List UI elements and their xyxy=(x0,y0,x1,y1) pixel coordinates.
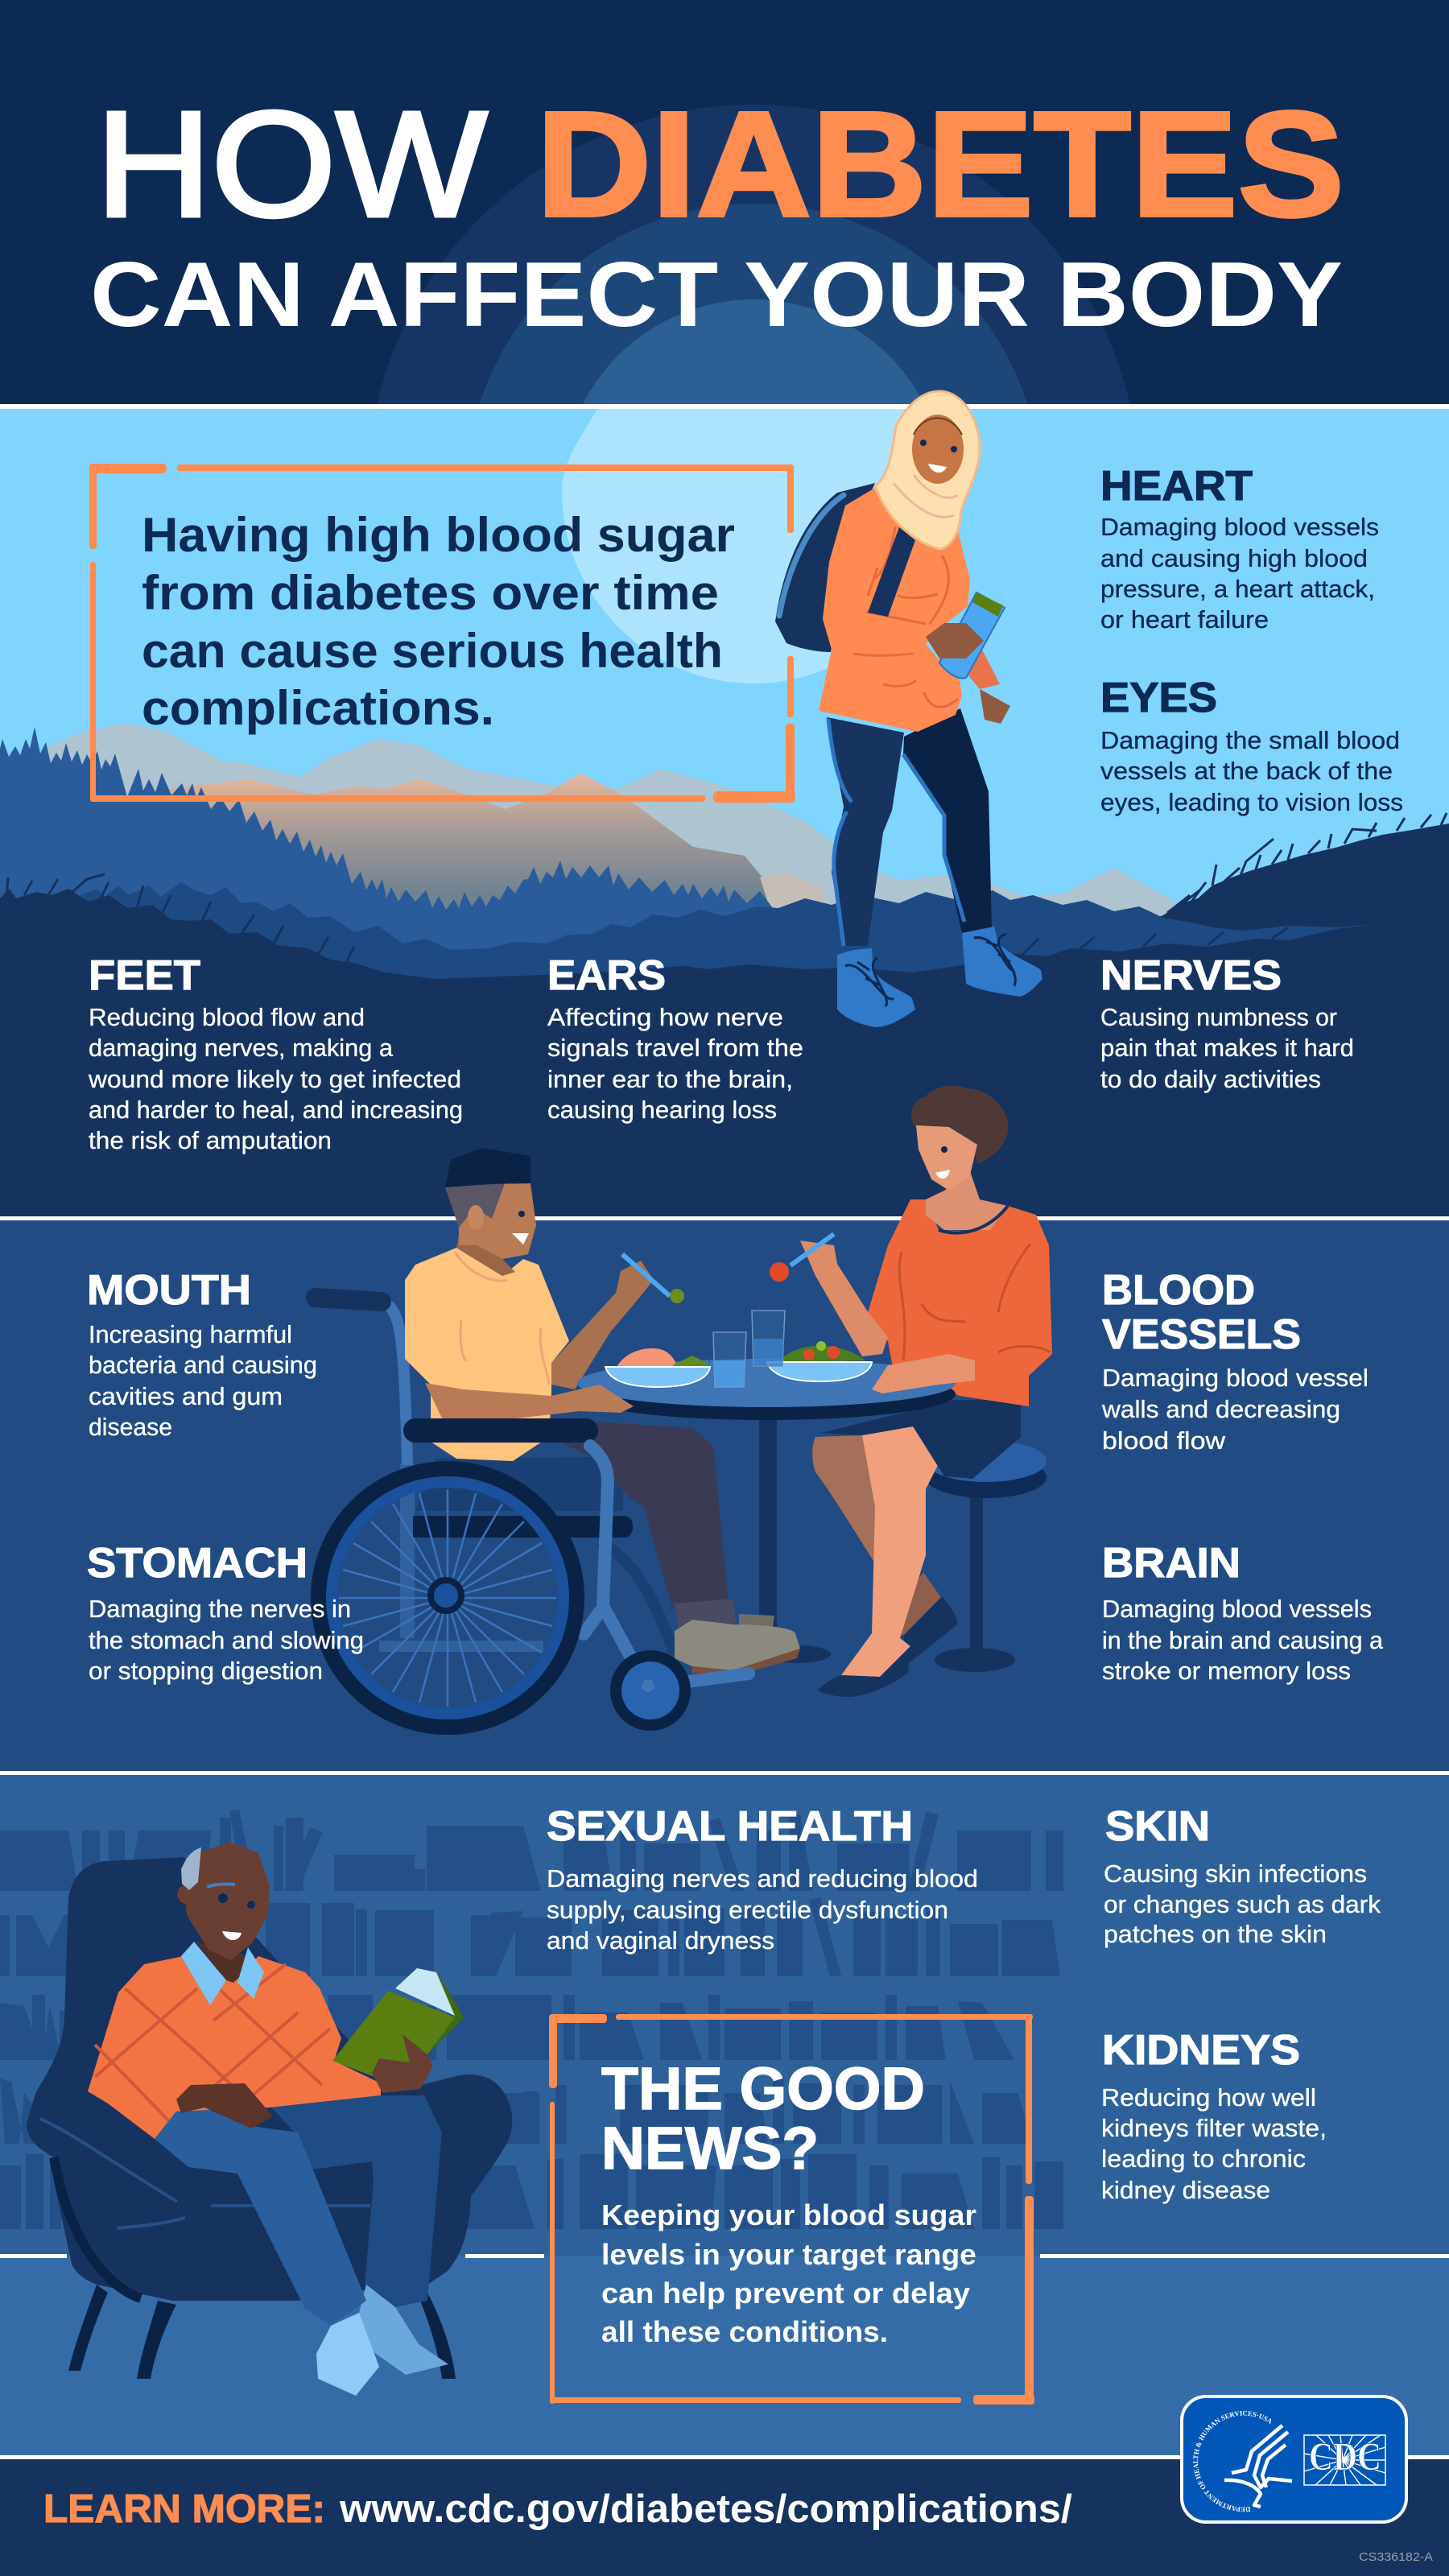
chair legs xyxy=(68,2285,456,2379)
text block: sexual health: SEXUAL HEALTH xyxy=(547,1803,913,1850)
ear xyxy=(468,1205,484,1229)
skirt xyxy=(821,1400,1021,1479)
man in wheelchair xyxy=(316,1148,800,1676)
text block: heart: HEART xyxy=(1100,463,1253,510)
text block: heart: and causing high blood xyxy=(1100,544,1368,572)
text block: nerves: to do daily activities xyxy=(1100,1065,1321,1093)
neck xyxy=(926,1171,1008,1230)
text block: stomach: the stomach and slowing xyxy=(89,1626,364,1654)
trouser cuff xyxy=(675,1599,736,1631)
text block: ears: inner ear to the brain, xyxy=(547,1065,793,1093)
hand on book xyxy=(372,2034,433,2093)
head xyxy=(185,1842,270,1960)
text block: stomach: STOMACH xyxy=(87,1540,308,1587)
handle xyxy=(316,1298,382,1302)
right bowl with salad xyxy=(767,1341,872,1381)
text block: feet: and harder to heal, and increasing xyxy=(89,1096,463,1124)
far arm xyxy=(800,1241,888,1356)
good news heading xyxy=(601,2055,925,2182)
argyle pattern xyxy=(95,1964,330,2129)
middle hill with grass xyxy=(80,882,1393,998)
text block: brain: stroke or memory loss xyxy=(1102,1657,1351,1685)
intro text: can cause serious health xyxy=(142,624,723,678)
title word: how: HOW xyxy=(96,81,487,248)
panel: header background xyxy=(0,0,1449,405)
left front hill and foreground xyxy=(0,889,1449,998)
hair xyxy=(181,1847,201,1890)
neck xyxy=(456,1228,515,1276)
water bottle xyxy=(939,592,1005,679)
good news text: can help prevent or delay xyxy=(601,2277,970,2310)
back leg xyxy=(903,708,992,933)
text block: heart: pressure, a heart attack, xyxy=(1100,575,1375,603)
text block: skin xyxy=(1104,1803,1381,1948)
intro text: Having high blood sugar xyxy=(142,508,735,562)
text block: brain xyxy=(1102,1540,1384,1685)
good news text: all these conditions. xyxy=(601,2315,888,2348)
sun rings in header xyxy=(367,105,1140,877)
subtitle: CAN AFFECT YOUR BODY xyxy=(90,244,1343,346)
hand xyxy=(926,623,984,658)
text block: stomach: Damaging the nerves in xyxy=(89,1595,351,1623)
document code: CS336182-A xyxy=(1359,2550,1433,2564)
eyes xyxy=(218,1893,255,1909)
hair xyxy=(445,1148,530,1187)
CDC box: CDC xyxy=(1309,2434,1381,2479)
text block: brain: Damaging blood vessels xyxy=(1102,1595,1372,1623)
text block: mouth: Increasing harmful xyxy=(89,1320,292,1348)
shoulder strap xyxy=(868,527,915,617)
logo: HHS and CDC xyxy=(1180,2395,1408,2524)
text block: ears: Affecting how nerve xyxy=(547,1003,783,1031)
far mountains xyxy=(0,723,1183,950)
hair xyxy=(911,1086,1009,1164)
text block: eyes xyxy=(1100,675,1403,816)
face xyxy=(916,1125,977,1191)
hair fade xyxy=(445,1183,505,1228)
text block: eyes: Damaging the small blood xyxy=(1100,726,1400,754)
neck xyxy=(196,1942,248,1983)
text block: feet: Reducing blood flow and xyxy=(89,1003,365,1031)
armchair xyxy=(27,1857,512,2301)
fork with tomato xyxy=(770,1234,834,1282)
text block: sexual health: supply, causing erectile dysfunction xyxy=(547,1896,948,1924)
text block: brain: BRAIN xyxy=(1102,1540,1241,1587)
table top xyxy=(577,1359,956,1420)
front leg xyxy=(827,717,904,946)
table foot shadow xyxy=(763,1645,831,1663)
face xyxy=(912,415,964,484)
far shoe xyxy=(903,1596,957,1664)
callout frame: intro xyxy=(89,464,795,803)
far leg xyxy=(271,2095,442,2307)
man's near arm xyxy=(425,1383,634,1426)
hand on knee xyxy=(176,2083,273,2128)
text block: nerves: NERVES xyxy=(1100,952,1282,999)
rear strut xyxy=(600,1542,675,1654)
logo: HHS and CDC: DEPARTMENT OF HEALTH & HUMAN SERVICES·USA xyxy=(1193,2410,1272,2512)
near leg xyxy=(155,2110,366,2326)
text block: blood vessels: Damaging blood vessel xyxy=(1102,1364,1368,1392)
caster wheel xyxy=(610,1650,691,1731)
book xyxy=(332,1968,464,2079)
section dividers xyxy=(0,1216,1449,1775)
text block: skin: or changes such as dark xyxy=(1104,1890,1381,1918)
HHS eagle xyxy=(1224,2425,1292,2507)
glasses of water xyxy=(713,1311,785,1387)
woman's near arm xyxy=(872,1354,975,1393)
footer link: LEARN MORE: xyxy=(43,2487,325,2531)
collar xyxy=(181,1942,264,2005)
text block: eyes: eyes, leading to vision loss xyxy=(1100,788,1403,816)
text block: brain: in the brain and causing a xyxy=(1102,1626,1384,1654)
text block: stomach: or stopping digestion xyxy=(89,1657,323,1685)
backpack xyxy=(775,483,875,652)
text block: ears: EARS xyxy=(547,952,666,999)
big wheel xyxy=(319,1469,576,1727)
text block: skin: SKIN xyxy=(1105,1803,1210,1850)
footer divider xyxy=(0,2455,1449,2459)
forest xyxy=(0,727,805,982)
far sock xyxy=(359,2285,448,2375)
boots xyxy=(837,948,915,1027)
text block: skin: patches on the skin xyxy=(1104,1920,1327,1948)
text block: mouth: cavities and gum xyxy=(89,1382,283,1410)
text block: nerves xyxy=(1100,952,1354,1093)
smile xyxy=(935,1170,950,1179)
text block: kidneys: kidneys filter waste, xyxy=(1101,2114,1327,2142)
near sock xyxy=(316,2313,379,2396)
fork with broccoli xyxy=(622,1254,684,1303)
text block: heart xyxy=(1100,463,1379,634)
jacket xyxy=(819,488,970,732)
illustration: meal at table xyxy=(316,1086,1052,1731)
hijab xyxy=(875,391,980,549)
good news text xyxy=(601,2198,976,2348)
good news text: Keeping your blood sugar xyxy=(601,2198,976,2231)
header divider xyxy=(0,404,1449,409)
text block: heart: or heart failure xyxy=(1100,605,1269,634)
panel: lower hill band xyxy=(0,990,1449,1219)
callout frame: good news xyxy=(549,2014,1034,2405)
trousers xyxy=(549,1422,729,1608)
smile xyxy=(512,1233,529,1245)
text block: mouth: MOUTH xyxy=(87,1267,251,1314)
smile xyxy=(222,1931,242,1940)
text block: sexual health: and vaginal dryness xyxy=(547,1926,774,1955)
landscape xyxy=(0,723,1449,998)
title word: diabetes: DIABETES xyxy=(536,81,1344,248)
blouse xyxy=(867,1199,1052,1406)
shoes xyxy=(739,1614,774,1631)
text block: ears: signals travel from the xyxy=(547,1034,803,1062)
left bowl with salmon xyxy=(605,1348,710,1387)
text block: feet: damaging nerves, making a xyxy=(89,1034,394,1062)
text block: kidneys: Reducing how well xyxy=(1101,2083,1316,2112)
text block: feet: wound more likely to get infected xyxy=(88,1065,461,1093)
grass blades on front hills xyxy=(6,874,1288,963)
seat bar xyxy=(413,1516,633,1538)
grass blades on right hill xyxy=(1167,813,1447,913)
armrest xyxy=(415,1418,586,1443)
text block: eyes: EYES xyxy=(1100,675,1217,721)
rear frame behind wheel xyxy=(379,1463,543,1652)
near shoe xyxy=(818,1646,910,1697)
near leg xyxy=(841,1426,941,1677)
text block: mouth: disease xyxy=(89,1413,172,1441)
text block: kidneys: KIDNEYS xyxy=(1102,2027,1300,2074)
good news text: levels in your target range xyxy=(601,2238,976,2271)
text block: blood vessels xyxy=(1101,1267,1368,1455)
panel: library section xyxy=(0,1773,1449,2256)
text block: feet: the risk of amputation xyxy=(89,1126,332,1154)
text block: nerves: Causing numbness or xyxy=(1100,1003,1337,1031)
table leg xyxy=(759,1420,777,1655)
text block: eyes: vessels at the back of the xyxy=(1100,757,1393,785)
illustration: woman hiking xyxy=(775,391,1042,1027)
eyebrow xyxy=(207,1884,235,1887)
wheelchair back frame xyxy=(385,1302,407,1465)
panel: sky xyxy=(0,407,1449,987)
text block: blood vessels: blood flow xyxy=(1102,1426,1226,1455)
text block: kidneys xyxy=(1101,2027,1327,2204)
intro text: complications. xyxy=(142,681,494,735)
text block: skin: Causing skin infections xyxy=(1104,1860,1367,1888)
far leg xyxy=(890,1572,942,1636)
title xyxy=(90,81,1344,346)
text block: blood vessels: BLOOD xyxy=(1102,1267,1255,1314)
text block: blood vessels: walls and decreasing xyxy=(1101,1395,1340,1423)
right front hill xyxy=(1151,824,1449,982)
text block: heart: Damaging blood vessels xyxy=(1100,513,1379,541)
text block: ears: causing hearing loss xyxy=(547,1096,777,1124)
panel: meal section xyxy=(0,1217,1449,1773)
illustration: man reading in armchair xyxy=(27,1842,512,2396)
text block: feet xyxy=(88,952,463,1154)
woman at table xyxy=(770,1086,1052,1697)
lower divider xyxy=(0,2254,1449,2258)
intro text xyxy=(142,508,735,735)
text block: blood vessels: VESSELS xyxy=(1102,1311,1301,1358)
sun in sky xyxy=(562,407,945,683)
good news heading: THE GOOD xyxy=(601,2055,925,2122)
footer link: www.cdc.gov/diabetes/complications/ xyxy=(339,2487,1072,2531)
good news heading: NEWS? xyxy=(601,2115,819,2182)
smile xyxy=(928,464,947,473)
text block: sexual health xyxy=(547,1803,978,1955)
text block: ears xyxy=(547,952,803,1124)
text block: feet: FEET xyxy=(89,952,200,999)
seat cushion xyxy=(415,1457,623,1511)
bookshelf background xyxy=(0,1809,1063,2229)
text block: stomach xyxy=(87,1540,364,1685)
far arm xyxy=(551,1261,654,1389)
text block: mouth: bacteria and causing xyxy=(89,1351,317,1379)
sweater xyxy=(88,1956,381,2139)
wheelchair front frame xyxy=(584,1446,749,1686)
text block: mouth xyxy=(87,1267,317,1441)
stool xyxy=(926,1440,1046,1672)
panel: footer xyxy=(0,2459,1449,2576)
footer link xyxy=(43,2487,1072,2531)
text block: kidneys: leading to chronic xyxy=(1101,2145,1306,2173)
text block: sexual health: Damaging nerves and reducing blood xyxy=(547,1864,978,1893)
face xyxy=(459,1183,536,1259)
shirt xyxy=(405,1248,569,1461)
intro text: from diabetes over time xyxy=(142,566,719,620)
text block: kidneys: kidney disease xyxy=(1101,2176,1270,2204)
panel: floor section xyxy=(0,2256,1449,2457)
text block: nerves: pain that makes it hard xyxy=(1100,1034,1354,1062)
